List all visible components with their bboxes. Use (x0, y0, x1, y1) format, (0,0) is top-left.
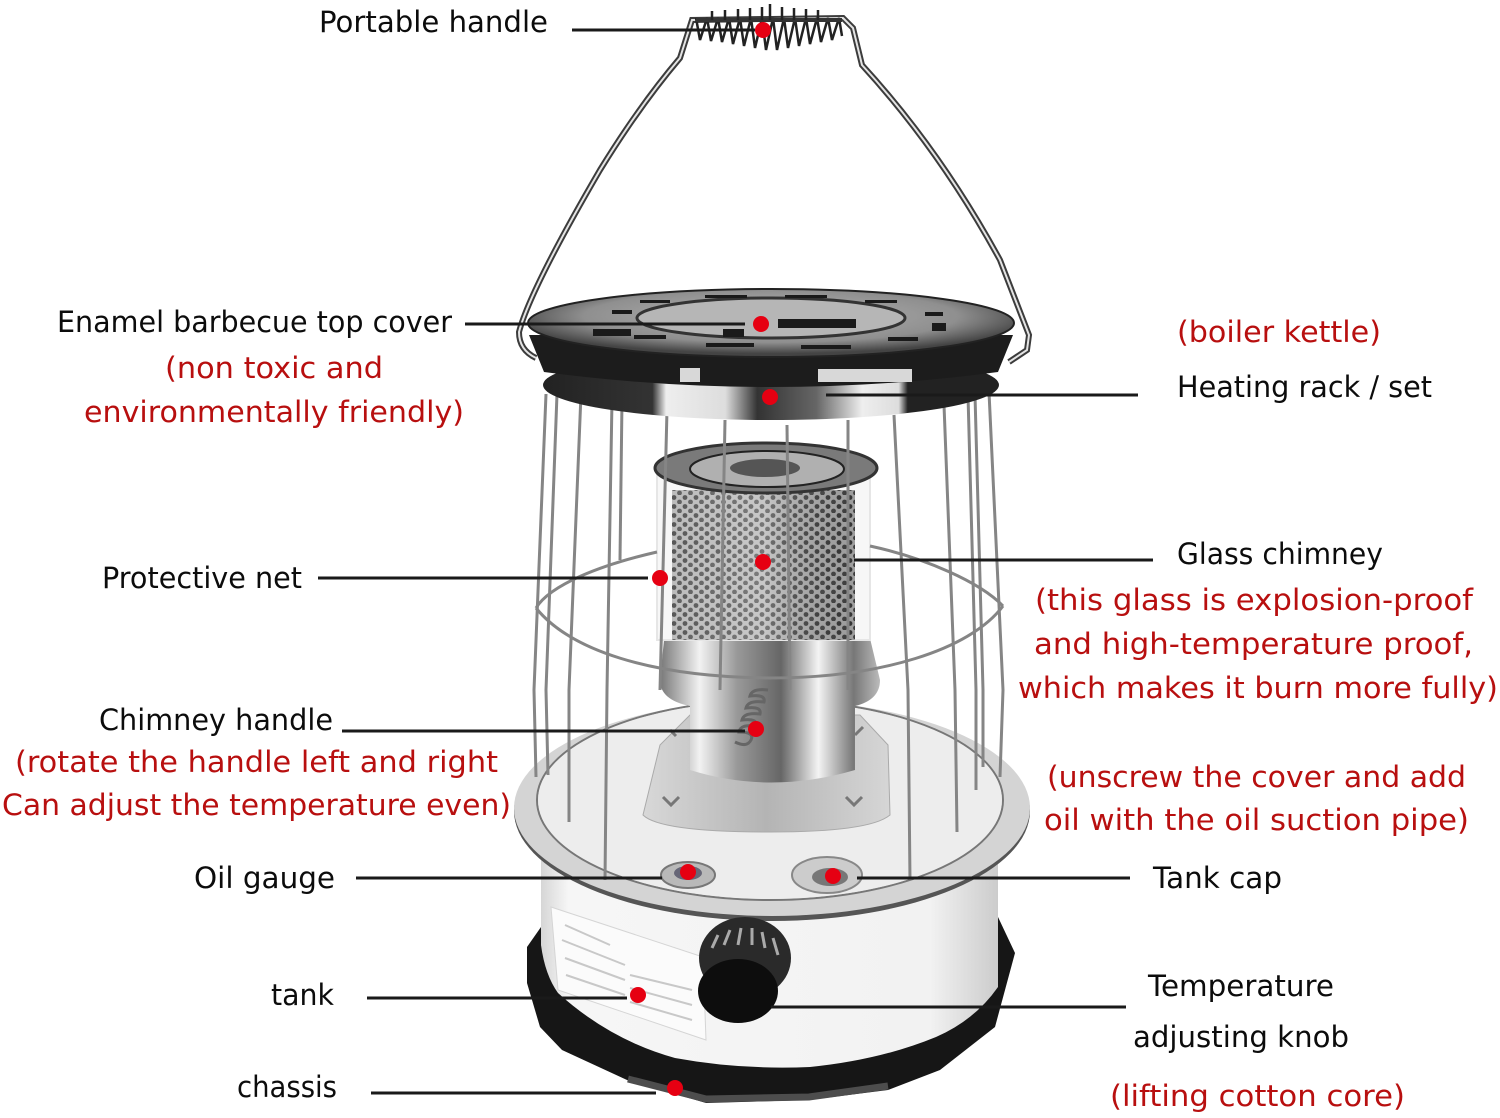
label: enamel barbecue top cover: Enamel barbecue top cover (57, 305, 452, 339)
note: adjust temperature: Can adjust the temperature even) (2, 788, 511, 822)
label: adjusting knob: adjusting knob (1133, 1020, 1349, 1054)
note: high temperature proof: and high-temperature proof, (1034, 627, 1473, 661)
oil gauge (661, 862, 715, 888)
red marker dots (630, 22, 841, 1096)
heater illustration (514, 4, 1030, 1103)
glass chimney (655, 443, 877, 640)
label: tank cap: Tank cap (1152, 861, 1282, 895)
enamel top cover (528, 289, 1014, 387)
note: lifting cotton core: (lifting cotton core) (1110, 1079, 1405, 1113)
label: glass chimney: Glass chimney (1177, 537, 1383, 571)
burner base (660, 630, 880, 782)
portable handle (519, 4, 1029, 362)
note: burn more fully: which makes it burn more fully) (1018, 671, 1498, 705)
note: unscrew cover: (unscrew the cover and add (1047, 760, 1466, 794)
protective net (534, 392, 1003, 880)
note: environmentally friendly: environmentally friendly) (84, 395, 464, 429)
leader lines (318, 30, 1153, 1093)
heating rack (543, 350, 999, 420)
note: glass explosion proof: (this glass is explosion-proof (1035, 583, 1474, 617)
label: chimney handle: Chimney handle (99, 703, 333, 737)
note: non toxic: (non toxic and (165, 351, 383, 385)
label: oil gauge: Oil gauge (194, 861, 335, 895)
label: portable handle: Portable handle (319, 5, 548, 39)
note: oil suction pipe: oil with the oil suction pipe) (1044, 803, 1469, 837)
note: boiler kettle: (boiler kettle) (1177, 315, 1381, 349)
label: protective net: Protective net (102, 561, 302, 595)
tank cap (792, 857, 862, 893)
label: tank: tank (271, 978, 334, 1012)
chimney handle (735, 690, 768, 745)
label: temperature: Temperature (1147, 969, 1334, 1003)
label: heating rack: Heating rack / set (1177, 370, 1432, 404)
tank top tray (514, 700, 1030, 921)
label: chassis: chassis (237, 1070, 337, 1104)
tank (541, 850, 998, 1068)
chassis (527, 917, 1015, 1103)
note: rotate handle: (rotate the handle left and right (15, 745, 498, 779)
temperature knob (698, 917, 791, 1023)
